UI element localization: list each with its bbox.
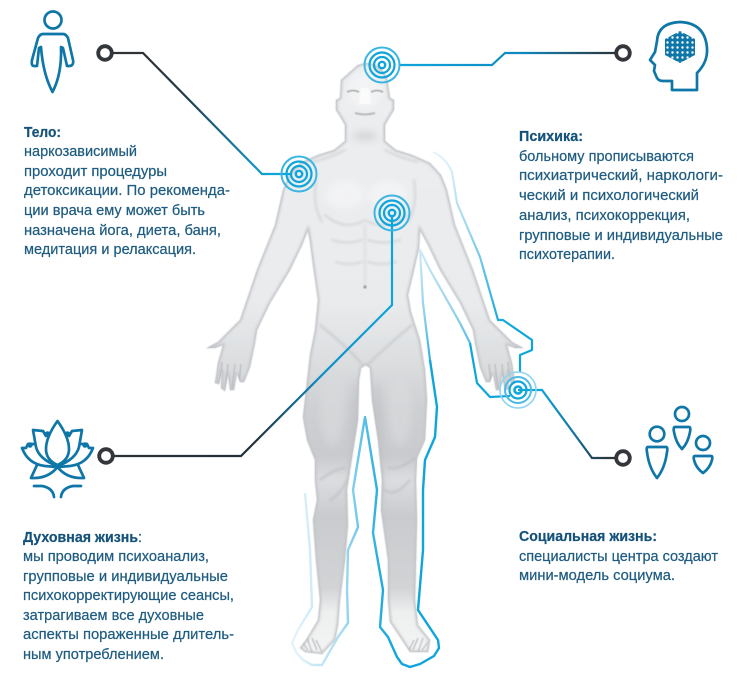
- icon: three people: [647, 407, 712, 478]
- body aura outline: right arm outer: [433, 152, 532, 397]
- text block: spiritual life: затрагиваем все духовные: [23, 608, 204, 624]
- human body figure: [207, 63, 523, 654]
- text block: spiritual life: ным употреблением.: [23, 647, 164, 663]
- text block: psyche: психотерапии.: [519, 247, 615, 263]
- icon: head with cube: [650, 22, 707, 90]
- connector ring: spiritual life: [99, 449, 113, 463]
- text block: body: ции врача ему может быть: [24, 203, 205, 219]
- target: chest: [374, 196, 410, 230]
- target: shoulder: [282, 156, 316, 192]
- face features: [347, 88, 383, 289]
- text block: body: наркозависимый: [24, 144, 137, 160]
- text block: psyche: психиатрический, наркологи-: [519, 168, 723, 184]
- icon: person: [32, 12, 73, 92]
- text block: psyche: больному прописываются: [519, 149, 694, 165]
- leader line: spiritual life: [113, 217, 392, 456]
- text block: psyche: [519, 129, 723, 263]
- text block: body: назначена йога, диета, баня,: [24, 223, 221, 239]
- text block: psyche: ческий и психологический: [519, 188, 699, 204]
- text block: spiritual life: психокорректирующие сеансы,: [23, 588, 234, 604]
- leader line: psyche: [399, 53, 616, 65]
- text block: social life: Социальная жизнь:: [519, 529, 657, 545]
- icon: lotus: [22, 421, 93, 497]
- text block: psyche: Психика:: [519, 129, 583, 145]
- leader line: body: [112, 53, 290, 174]
- muscle shading: [207, 63, 523, 654]
- text block: psyche: групповые и индивидуальные: [519, 228, 723, 244]
- text block: body: медитация и релаксация.: [24, 242, 196, 258]
- body aura outline: right arm inner: [420, 250, 470, 360]
- text block: body: проходит процедуры: [24, 164, 167, 180]
- text block: spiritual life: мы проводим психоанализ,: [23, 549, 209, 565]
- text block: psyche: анализ, психокоррекция,: [519, 208, 690, 224]
- target: hand: [500, 372, 536, 408]
- target: head: [364, 48, 400, 82]
- connector ring: psyche: [616, 46, 630, 60]
- connector ring: body: [98, 46, 112, 60]
- text block: social life: специалисты центра создают: [519, 549, 718, 565]
- leader line: social life: [518, 390, 616, 458]
- text block: body: детоксикации. По рекоменда-: [24, 183, 230, 199]
- text block: social life: [519, 529, 718, 584]
- body aura outline: legs: [292, 360, 439, 667]
- text block: spiritual life: групповые и индивидуальные: [23, 569, 228, 585]
- text block: social life: мини-модель социума.: [519, 568, 675, 584]
- connector ring: social life: [616, 451, 630, 465]
- text block: spiritual life: [23, 530, 234, 663]
- text block: spiritual life: аспекты пораженные длитель-: [23, 627, 234, 643]
- text block: spiritual life: Духовная жизнь:: [23, 530, 142, 546]
- fingers and toes: [220, 362, 510, 652]
- text block: body: [24, 125, 230, 258]
- text block: body: Тело:: [24, 125, 61, 141]
